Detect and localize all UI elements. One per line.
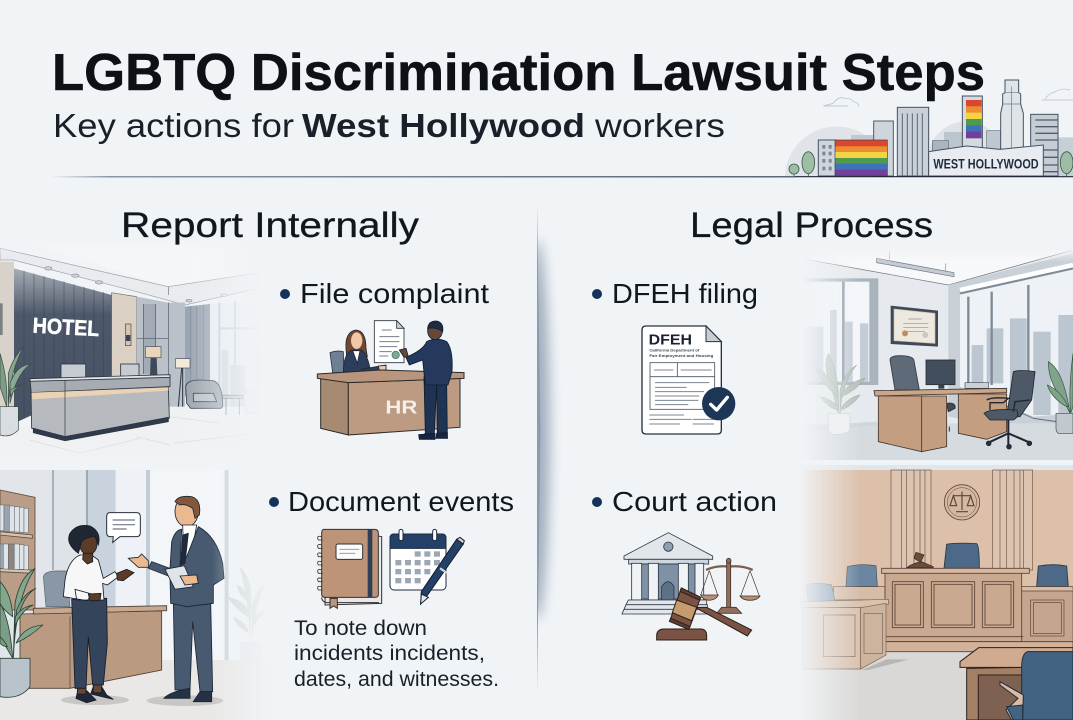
note text: dates, and witnesses. [294,668,499,691]
window-side plant [1047,353,1073,433]
speech bubble [107,513,140,542]
man [128,496,224,702]
floor lamp [145,347,190,407]
court seal [944,485,980,520]
desk [20,606,167,688]
notebook [318,529,382,608]
calendar [390,529,446,590]
document [374,321,404,363]
swivel chair [984,370,1035,449]
bookshelf [0,490,35,610]
plant [0,568,43,697]
icon: notebook, calendar, pen [318,529,464,608]
note text: To note down [294,617,427,640]
gavel on bench [907,552,933,568]
right windows [960,265,1073,418]
judge chair [944,543,979,568]
HOTEL sign: HOTEL [32,313,100,341]
rainbow mural [835,140,887,176]
HR woman [343,330,386,373]
icon: HR desk complaint [317,321,464,439]
subtitle: Key actions for [53,107,294,144]
title: LGBTQ Discrimination Lawsuit Steps [52,44,985,102]
background plant [228,567,256,633]
trees [789,152,1073,176]
left window [810,278,878,385]
monitor [926,360,988,389]
certificate [891,306,938,347]
lobby plant [0,347,31,436]
courthouse [622,533,713,614]
panel: workplace conversation scene [0,470,280,720]
counsel table [960,648,1073,720]
subtitle: West Hollywood [302,107,585,144]
icon: HR desk complaint: HR [385,396,418,417]
faded plant [815,353,865,434]
header skyline: West Hollywood [775,80,1073,177]
heading: Report Internally: Report Internally [121,206,420,245]
check badge [702,387,735,420]
side chairs [846,565,877,587]
witness stand [800,583,888,669]
icon: courthouse, scales, gavel [622,533,760,640]
icon: DFEH form: California Department of [649,347,700,352]
center divider [537,206,558,688]
side benches [833,587,1073,642]
reception desk [30,364,170,441]
subtitle: workers [594,107,725,144]
woman [63,525,134,703]
desk [874,388,1007,452]
icon: DFEH form: DFEH [649,332,692,348]
panel: hotel lobby scene [0,248,255,454]
shadows [61,695,129,705]
icon: DFEH form: Fair Employment and Housing [649,353,714,358]
office chair [43,571,70,607]
foreground chair [1000,652,1073,720]
panel: courtroom scene [790,465,1073,720]
note text: incidents incidents, [294,642,485,665]
rainbow tower [962,96,982,148]
panel: attorney office scene [800,250,1073,460]
pen [421,537,464,604]
man [399,321,452,439]
armchair [185,380,248,415]
judge bench [882,568,1073,652]
wall pillars [890,470,1033,570]
bullet: DFEH filing: DFEH filing [612,278,758,309]
icon: DFEH form [642,326,735,434]
scales [701,558,760,613]
note text [294,617,499,691]
sign [929,145,1043,176]
desk chair back [890,356,919,390]
subtitle [53,107,725,144]
heading: Legal Process: Legal Process [690,206,933,245]
bullet: Court action: Court action [612,486,777,517]
bullet: File complaint: File complaint [300,278,489,309]
ceiling light [877,250,954,277]
bullet: Document events: Document events [288,486,514,517]
gavel [657,588,752,640]
sign: WEST HOLLYWOOD [933,157,1039,172]
desk [317,370,464,435]
